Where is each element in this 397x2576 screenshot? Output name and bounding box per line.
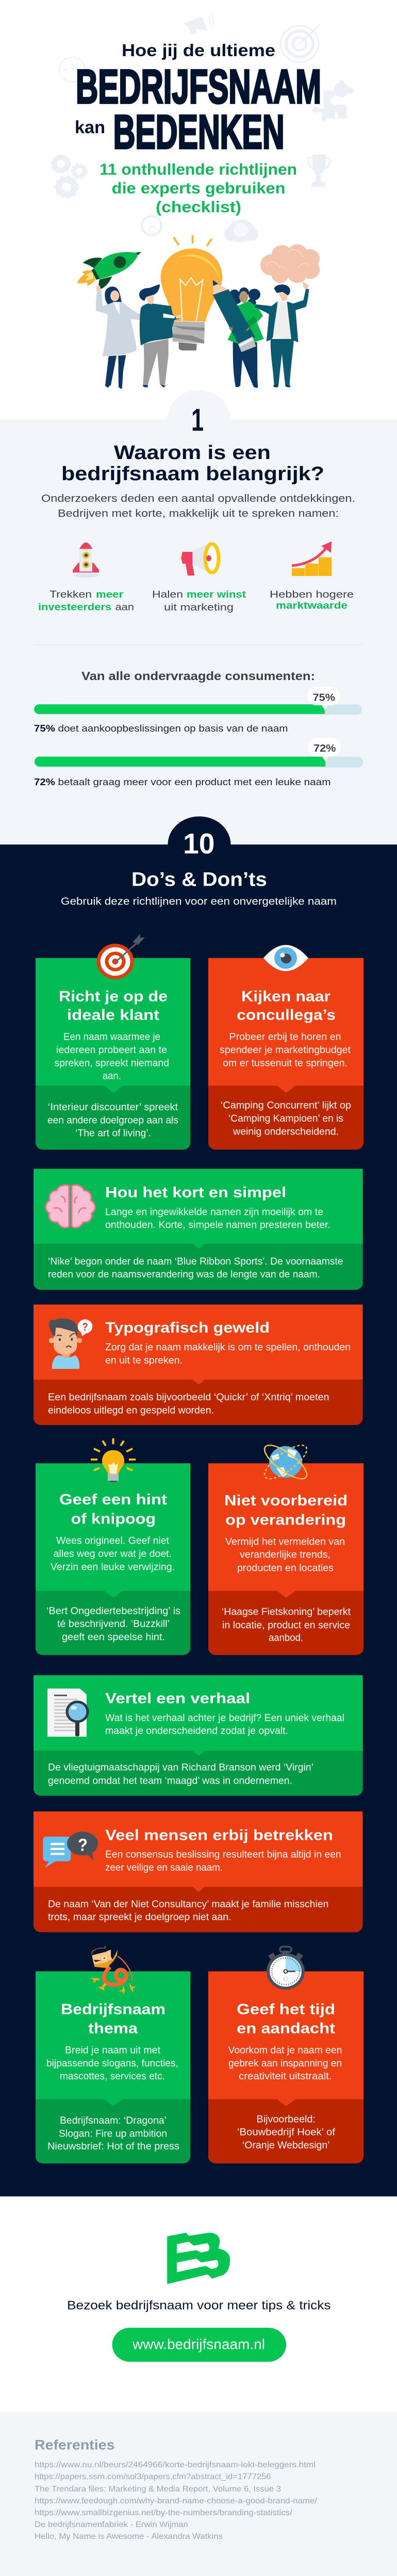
card: vertel een verhaal: De vliegtuigmaatschappij van Richard Branson werd ‘Virgin’ (48, 1762, 313, 1773)
icon: chat bubbles (43, 1832, 98, 1868)
icon: document with magnifier (47, 1688, 88, 1737)
card: geef het tijd en aandacht: ‘Bouwbedrijf Hoek’ of (237, 2127, 336, 2138)
bar chart: 72%: 72% (34, 776, 56, 787)
icon: stopwatch (267, 1947, 305, 1990)
card: bedrijfsnaam thema (36, 1946, 190, 2163)
subtitle (100, 161, 297, 216)
bar chart: 75%: 75% (313, 692, 335, 703)
bar chart: 72% (34, 738, 363, 787)
references list: https://papers.ssrn.com/sol3/papers.cfm?abstract_id=1777256 (35, 2473, 271, 2481)
title: BEDENKEN (113, 106, 285, 159)
card: niet voorbereid op verandering: veranderlijke trends, (240, 1549, 330, 1560)
card: typografisch geweld: Een bedrijfsnaam zoals bijvoorbeeld ‘Quickr’ of ‘Xntriq’ moeten (48, 1392, 329, 1403)
card: richt je op de ideale klant: ideale klant (67, 1007, 159, 1023)
subtitle: (checklist) (156, 198, 241, 216)
card: niet voorbereid op verandering: Niet voorbereid (224, 1493, 348, 1509)
card: hou het kort en simpel: ‘Nike’ begon onder de naam ‘Blue Ribbon Sports’. De voornaamste (48, 1256, 343, 1267)
references list: Hello, My Name is Awesome - Alexandra Watkins (35, 2532, 223, 2541)
card: hou het kort en simpel: Hou het kort en simpel (105, 1184, 286, 1201)
card: vertel een verhaal: genoemd omdat het team ‘maagd’ was in ondernemen. (48, 1775, 292, 1786)
benefit: investeerders: investeerders (38, 602, 111, 613)
card: bedrijfsnaam thema: Slogan: Fire up ambition (59, 2128, 167, 2139)
card: richt je op de ideale klant: ‘The art of living’. (75, 1128, 151, 1139)
icon: eye (263, 945, 308, 971)
card: vertel een verhaal: maakt je onderscheidend zodat je opvalt. (105, 1725, 288, 1736)
card: niet voorbereid op verandering: op verandering (225, 1512, 346, 1528)
card: geef het tijd en aandacht (208, 1947, 363, 2163)
icon: coins and growth arrow (292, 541, 332, 576)
section heading (61, 442, 324, 485)
icon: brain (46, 1185, 95, 1228)
benefit: winst (152, 589, 246, 613)
card: geef het tijd en aandacht: gebrek aan inspanning en (228, 2058, 342, 2069)
card: richt je op de ideale klant: Een naam waarmee je (63, 1031, 160, 1042)
icon: confused man: ? (82, 1320, 88, 1333)
section panel: do's and don'ts (0, 817, 397, 2196)
hero illustration: people with rocket, light bulb, pencil and brain (77, 235, 320, 389)
card: niet voorbereid op verandering: aanbod. (269, 1632, 303, 1643)
card: niet voorbereid op verandering (208, 1440, 363, 1655)
card: typografisch geweld: eindeloos uitlegd en gespeld worden. (48, 1405, 214, 1416)
title: Hoe jij de ultieme (122, 41, 275, 60)
card: geef een hint of knipoog: Wees origineel. Geef niet (56, 1535, 170, 1547)
bar chart: 75%: 75% (34, 723, 56, 734)
title: kan (75, 117, 105, 137)
card: richt je op de ideale klant: spreken, spreekt niemand (55, 1058, 169, 1069)
card: geef een hint of knipoog: té beschrijvend. ‘Buzzkill’ (57, 1618, 170, 1630)
card: geef een hint of knipoog: Geef een hint (59, 1492, 167, 1508)
card: geef het tijd en aandacht: Voorkom dat je naam een (228, 2045, 342, 2056)
benefit: marktwaarde (270, 589, 354, 611)
intro text: Onderzoekers deden een aantal opvallende ontdekkingen. (41, 493, 355, 504)
section heading: Do’s & Don’ts (131, 869, 267, 890)
section subtitle: Gebruik deze richtlijnen voor een onvergetelijke naam (61, 895, 337, 907)
intro text (41, 493, 355, 519)
background icons (52, 13, 354, 242)
references list: https://www.nu.nl/beurs/2464966/korte-bedrijfsnaam-lokt-beleggers.html (35, 2461, 316, 2469)
card: geef het tijd en aandacht: Bijvoorbeeld: (257, 2114, 316, 2125)
icon: chat bubbles: ? (78, 1835, 88, 1855)
card: richt je op de ideale klant: ‘Interieur discounter’ spreekt (48, 1101, 178, 1113)
card: kijken naar concullega's: spendeer je marketingbudget (220, 1044, 351, 1056)
references heading: Referenties (35, 2437, 114, 2453)
subtitle: die experts gebruiken (112, 179, 286, 197)
card: kijken naar concullega's: om er tussenuit te springen. (223, 1058, 348, 1069)
card: niet voorbereid op verandering: ‘Haagse Fietskoning’ beperkt (222, 1606, 351, 1618)
icon: rocket (73, 543, 99, 578)
card: vertel een verhaal: Wat is het verhaal achter je bedrijf? Een uniek verhaal (105, 1713, 344, 1724)
panel: referenties (0, 2412, 397, 2576)
icon: megaphone (180, 542, 219, 575)
card: geef een hint of knipoog (36, 1438, 190, 1655)
card: veel mensen erbij betrekken: Een consensus beslissing resulteert bijna altijd in een (105, 1849, 341, 1860)
card: niet voorbereid op verandering: producten en locaties (237, 1563, 334, 1573)
card: niet voorbereid op verandering: in locatie, product en service (222, 1620, 350, 1631)
section heading: Waarom is een (114, 442, 271, 464)
card: bedrijfsnaam thema: Bedrijfsnaam (61, 2001, 166, 2018)
card: hou het kort en simpel: Lange en ingewikkelde namen zijn moeilijk om te (105, 1207, 323, 1218)
references list: De bedrijfsnamenfabriek - Erwin Wijman (35, 2520, 188, 2529)
bar chart: 72%: betaalt graag meer voor een product met een leuke naam (58, 776, 331, 787)
website button: www.bedrijfsnaam.nl (132, 2336, 265, 2352)
card: veel mensen erbij betrekken: zeer veilige en saaie naam. (105, 1862, 223, 1873)
card: geef een hint of knipoog: alles weg over wat je doet. (54, 1549, 172, 1560)
website button (112, 2328, 286, 2362)
benefit: investeerders: aan (115, 602, 134, 613)
card: bedrijfsnaam thema: mascottes, services etc. (60, 2071, 165, 2082)
references list: https://www.smallbizgenius.net/by-the-numbers/branding-statistics/ (35, 2509, 293, 2517)
intro text: Bedrijven met korte, makkelijk uit te spreken namen: (58, 507, 339, 519)
title (75, 41, 321, 159)
bar chart: 72%: 72% (313, 742, 336, 754)
card: kijken naar concullega's: concullega’s (237, 1007, 336, 1023)
icon: confused man (49, 1318, 92, 1369)
icon: light bulb (91, 1438, 136, 1482)
icon: dragon (89, 1946, 137, 1994)
icon: target with dart (97, 934, 145, 979)
card: kijken naar concullega's: ‘Camping Concurrent’ lijkt op (221, 1100, 351, 1111)
card: geef het tijd en aandacht: en aandacht (237, 2020, 335, 2037)
card: hou het kort en simpel: onthouden. Korte, simpele namen presteren beter. (105, 1219, 330, 1230)
card: veel mensen erbij betrekken: Veel mensen erbij betrekken (105, 1827, 333, 1843)
card: geef een hint of knipoog: Verzin een leuke verwijzing. (51, 1562, 175, 1572)
card: hou het kort en simpel (34, 1169, 363, 1290)
section number 10: 10 (183, 828, 214, 860)
card: richt je op de ideale klant: aan. (103, 1071, 121, 1081)
references list: https://www.feedough.com/why-brand-name-choose-a-good-brand-name/ (35, 2497, 318, 2505)
card: geef het tijd en aandacht: ‘Oranje Webdesign’ (242, 2140, 330, 2151)
card: kijken naar concullega's: Kijken naar (241, 988, 330, 1005)
benefit: investeerders: Trekken (49, 589, 92, 600)
card: typografisch geweld: Typografisch geweld (105, 1319, 270, 1336)
card: kijken naar concullega's (208, 945, 363, 1149)
card: richt je op de ideale klant: Richt je op de (59, 988, 168, 1005)
card: vertel een verhaal (34, 1675, 363, 1795)
card: kijken naar concullega's: Probeer erbij te horen en (229, 1031, 341, 1042)
card: geef een hint of knipoog: of knipoog (71, 1511, 156, 1527)
card: typografisch geweld: en uit te spreken. (105, 1355, 183, 1366)
call to action text: Bezoek bedrijfsnaam voor meer tips & tricks (67, 2299, 331, 2313)
card: geef een hint of knipoog: geeft een speelse hint. (62, 1632, 165, 1642)
references list: The Trendara files: Marketing & Media Report, Volume 6, Issue 3 (35, 2485, 281, 2494)
benefit: marktwaarde: Hebben hogere (270, 589, 354, 600)
card: richt je op de ideale klant (36, 934, 190, 1149)
card: hou het kort en simpel: reden voor de naamsverandering was de lengte van de naam. (48, 1269, 320, 1280)
icon: globe with orbits (260, 1440, 311, 1484)
benefit: winst: Halen (152, 589, 183, 600)
references list (35, 2461, 318, 2541)
bar chart: 75% (34, 687, 362, 734)
subtitle: 11 onthullende richtlijnen (100, 161, 297, 178)
statistics heading: Van alle ondervraagde consumenten: (81, 670, 315, 683)
card: richt je op de ideale klant: een andere doelgroep aan als (47, 1115, 178, 1126)
card: bedrijfsnaam thema: Nieuwsbrief: Hot of the press (47, 2141, 179, 2152)
card: typografisch geweld: Zorg dat je naam makkelijk is om te spellen, onthouden (105, 1342, 351, 1353)
benefit: investeerders: meer (96, 589, 123, 600)
card: bedrijfsnaam thema: bijpassende slogans, functies, (46, 2058, 178, 2069)
card: bedrijfsnaam thema: thema (88, 2020, 138, 2037)
card: geef het tijd en aandacht: creativiteit uitstraalt. (239, 2071, 332, 2082)
benefit: marktwaarde: marktwaarde (276, 600, 348, 611)
card: vertel een verhaal: Vertel een verhaal (105, 1690, 250, 1707)
card: kijken naar concullega's: ‘Camping Kampioen’ en is (228, 1113, 343, 1124)
benefit: winst: meer winst (187, 589, 246, 600)
section number 1: 1 (191, 402, 204, 438)
logo (167, 2233, 230, 2284)
section panel: waarom is een bedrijfsnaam belangrijk (0, 390, 397, 849)
card: veel mensen erbij betrekken (34, 1811, 363, 1932)
card: bedrijfsnaam thema: Bedrijfsnaam: ‘Dragona’ (60, 2115, 167, 2126)
card: veel mensen erbij betrekken: De naam ‘Van der Niet Consultancy’ maakt je familie misschien (48, 1899, 329, 1910)
card: veel mensen erbij betrekken: trots, maar spreekt je doelgroep niet aan. (48, 1911, 231, 1923)
section heading: bedrijfsnaam belangrijk? (61, 463, 324, 485)
card: geef een hint of knipoog: ‘Bert Ongediertebestrijding’ is (46, 1605, 180, 1617)
card: bedrijfsnaam thema: Breid je naam uit met (65, 2045, 161, 2056)
bar chart: 75%: doet aankoopbeslissingen op basis van de naam (58, 723, 288, 734)
card: geef het tijd en aandacht: Geef het tijd (237, 2001, 335, 2018)
card: niet voorbereid op verandering: Vermijd het vermelden van (225, 1536, 345, 1548)
card: kijken naar concullega's: weinig onderscheidend. (233, 1126, 339, 1137)
benefit: investeerders (38, 589, 134, 613)
card: typografisch geweld (34, 1304, 363, 1425)
benefit: winst: uit marketing (164, 602, 234, 613)
card: richt je op de ideale klant: iedereen probeert aan te (56, 1044, 167, 1056)
